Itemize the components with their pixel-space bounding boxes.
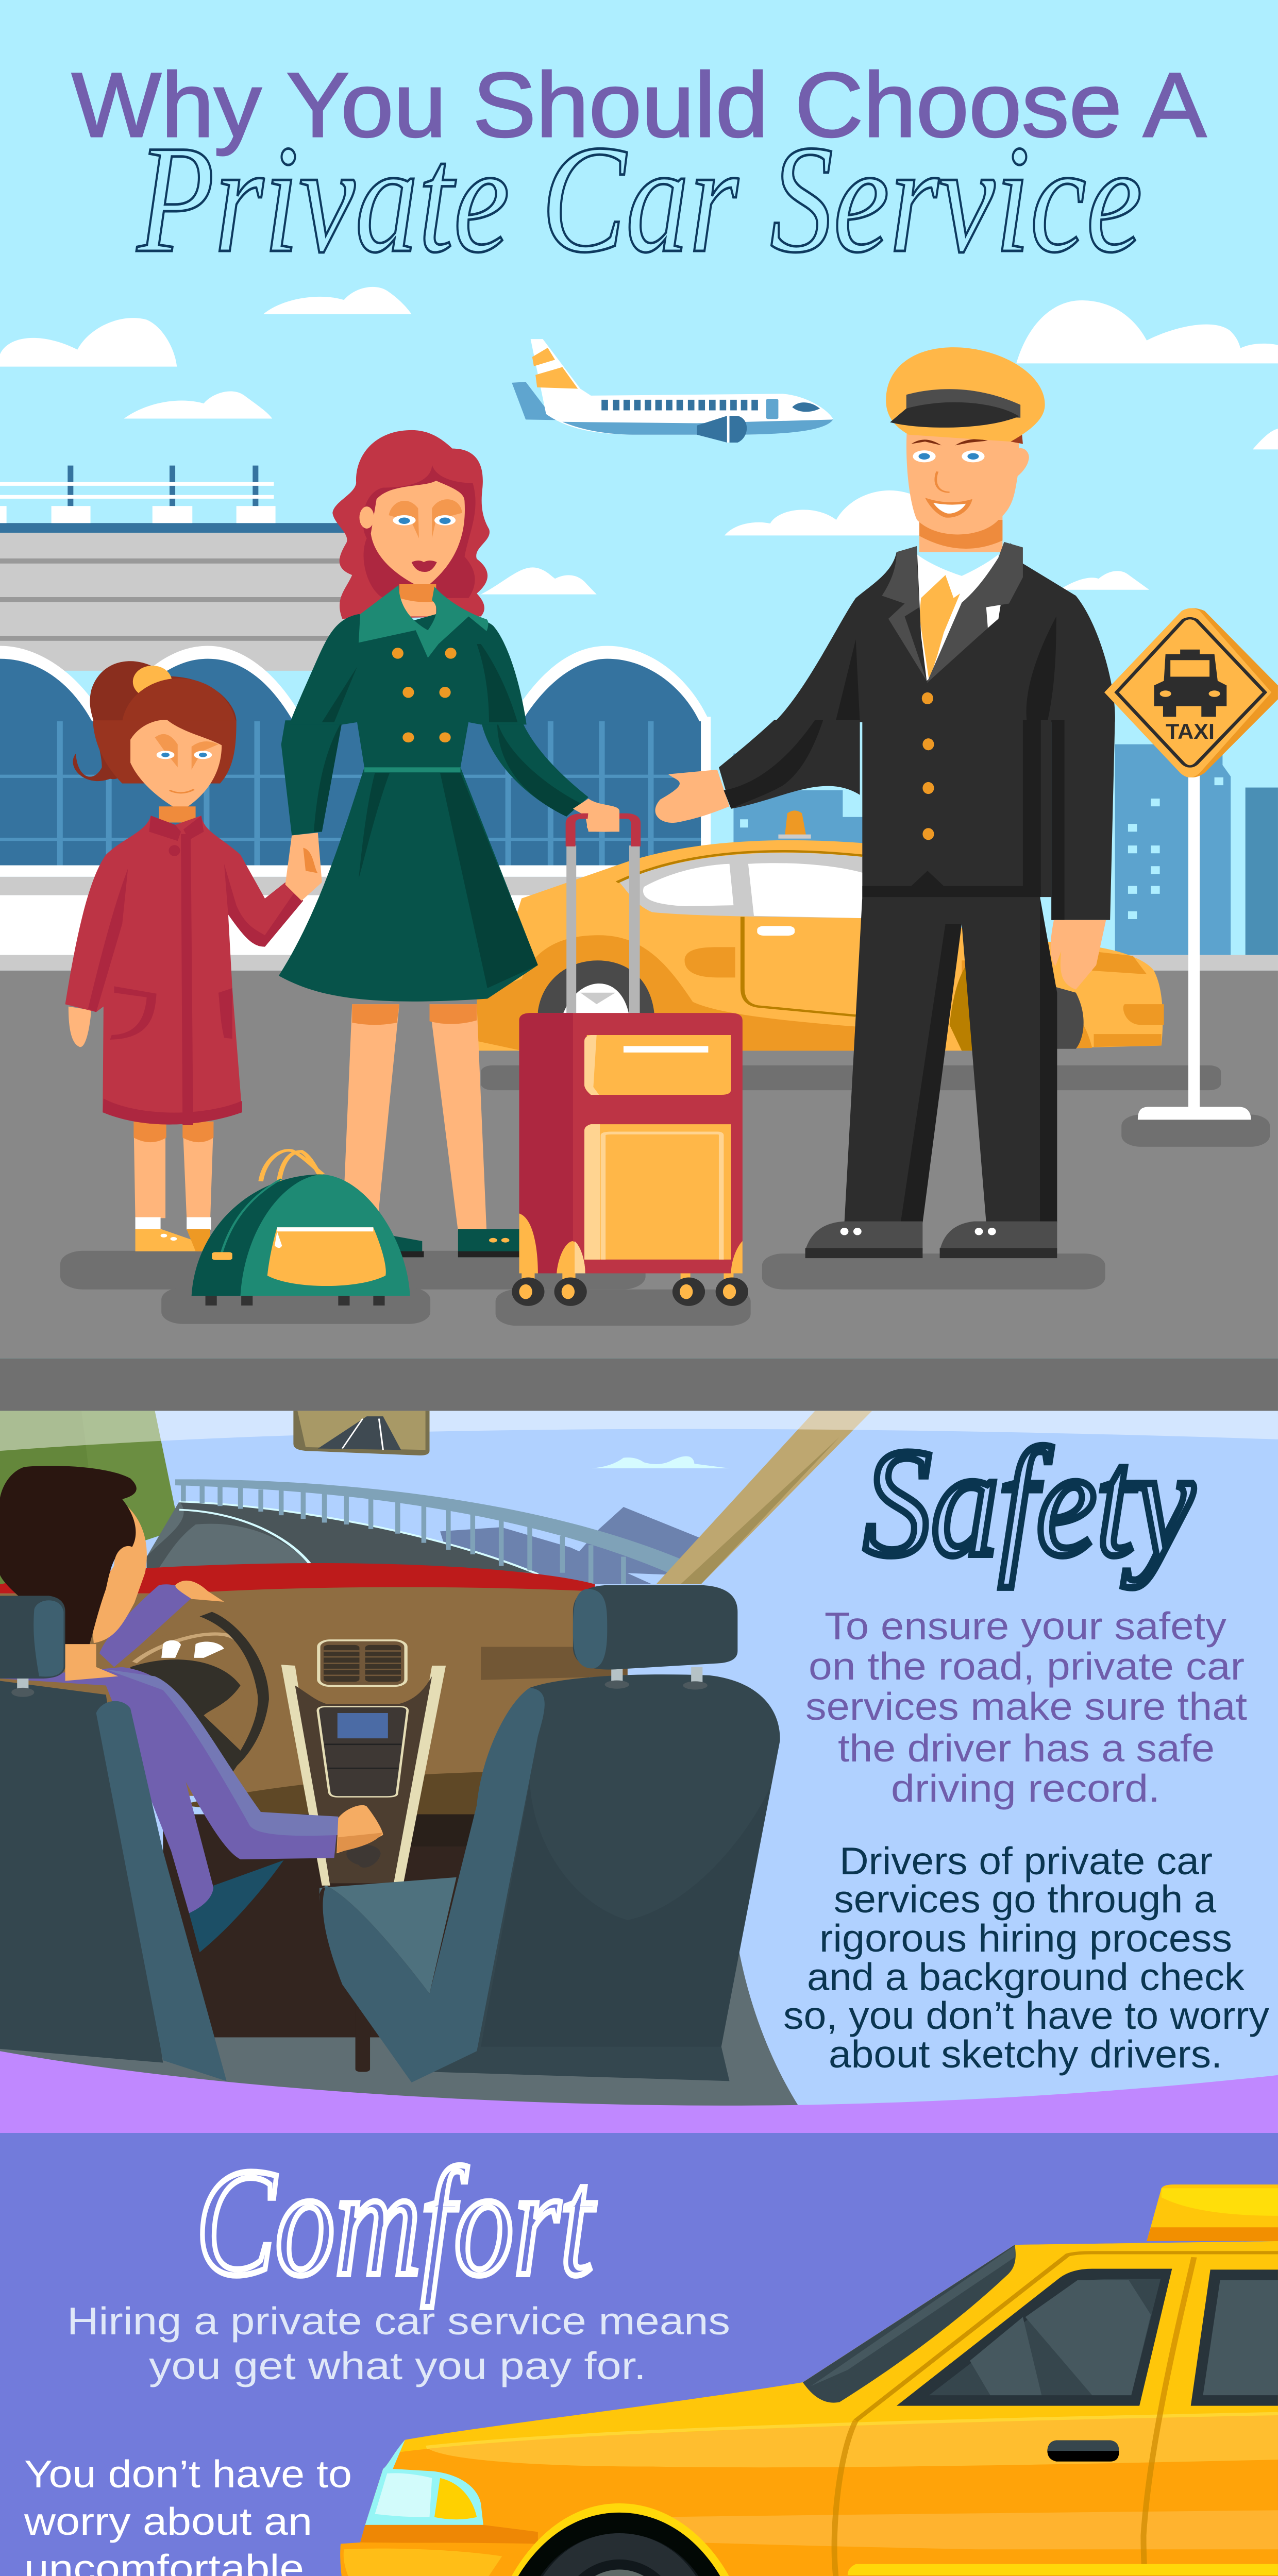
- clouds: [0, 287, 1278, 595]
- icon: airplane: [512, 339, 833, 443]
- comfort text: details: [24, 2452, 544, 2576]
- panel: hero: [0, 0, 1278, 1414]
- road surface: [0, 955, 1278, 1414]
- comfort text: details: You don’t have to: [24, 2452, 352, 2496]
- comfort background: [0, 2133, 1278, 2576]
- title line one: Why You Should Choose A: [72, 54, 1206, 156]
- safety text: purple paragraph: To ensure your safety: [825, 1604, 1227, 1648]
- panel: safety: [0, 1411, 1278, 2136]
- safety text: purple paragraph: on the road, private car: [809, 1645, 1245, 1688]
- chauffeur: [655, 347, 1115, 1258]
- safety text: purple paragraph: [805, 1604, 1247, 1810]
- mother: [279, 430, 619, 1257]
- yellow taxi behind family: [477, 810, 1164, 1050]
- icon: taxi road sign: [1104, 608, 1278, 1120]
- safety text: dark paragraph: services go through a: [834, 1877, 1216, 1921]
- city skyline: [733, 744, 1278, 955]
- icon: backpack: [192, 1150, 410, 1306]
- illustration: yellow taxi: [340, 2184, 1278, 2576]
- comfort text: intro: Hiring a private car service means: [67, 2299, 730, 2343]
- safety illustration: car interior: [0, 1411, 1278, 2136]
- safety text: dark paragraph: Drivers of private car: [839, 1839, 1213, 1883]
- safety text: dark paragraph: rigorous hiring process: [819, 1917, 1232, 1960]
- comfort text: details: worry about an: [24, 2500, 312, 2543]
- safety text: purple paragraph: driving record.: [891, 1767, 1160, 1810]
- airport terminal building: [0, 466, 711, 955]
- safety text: dark paragraph: so, you don’t have to worry: [783, 1994, 1270, 2037]
- icon: rolling suitcase: [512, 805, 748, 1306]
- safety text: purple paragraph: services make sure that: [805, 1685, 1247, 1728]
- comfort text: intro: [67, 2299, 730, 2387]
- comfort text: intro: you get what you pay for.: [149, 2344, 646, 2387]
- sign label: TAXI: [1166, 719, 1215, 743]
- safety text: dark paragraph: about sketchy drivers.: [829, 2032, 1222, 2076]
- traveling girl: [65, 661, 303, 1251]
- safety text: purple paragraph: the driver has a safe: [838, 1726, 1215, 1770]
- heading: Safety: Safety: [864, 1417, 1195, 1588]
- panel: comfort: [0, 2133, 1278, 2576]
- heading: Comfort: Comfort: [196, 2137, 597, 2308]
- illustration: airport scene: [0, 287, 1278, 1414]
- safety text: dark paragraph: [783, 1839, 1270, 2076]
- sky background: [0, 0, 1278, 979]
- safety text: dark paragraph: and a background check: [807, 1955, 1245, 1998]
